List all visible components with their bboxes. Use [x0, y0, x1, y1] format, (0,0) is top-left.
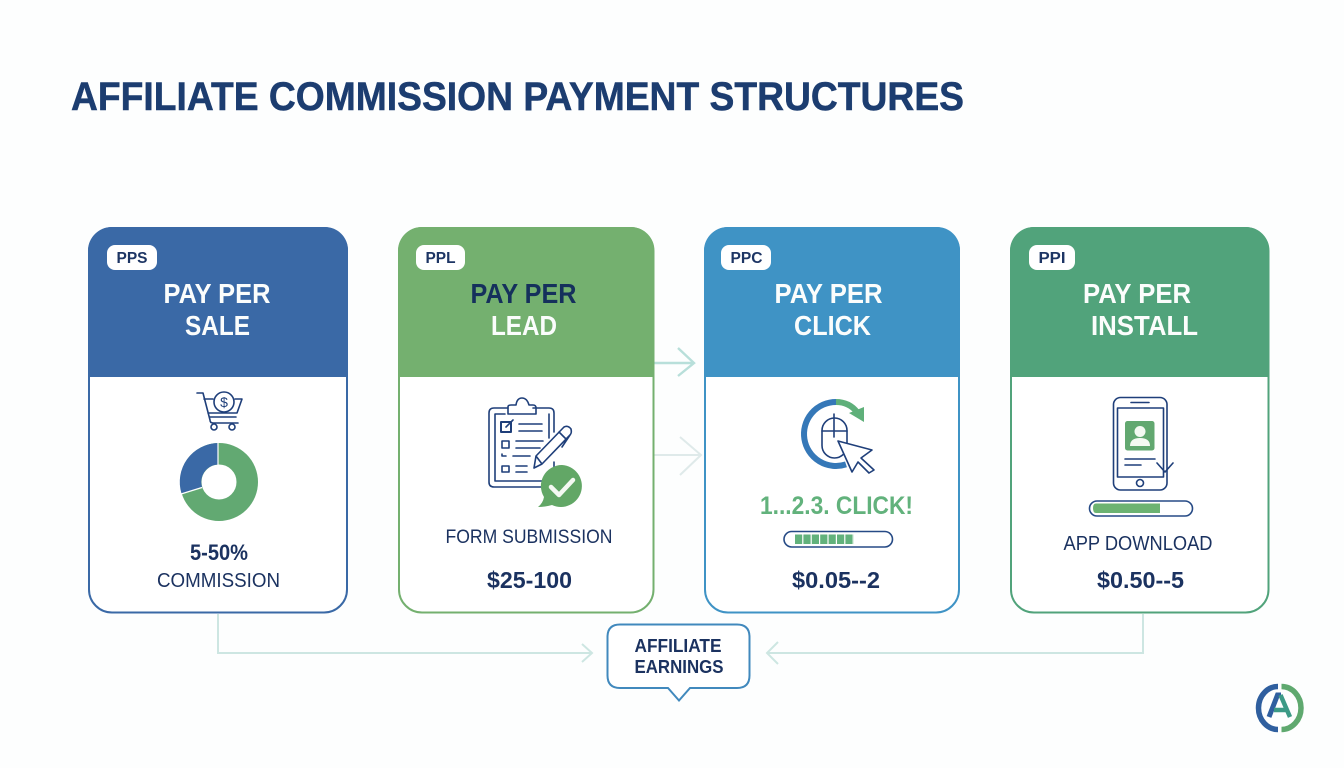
icon: clipboard form with pen and check — [489, 398, 582, 507]
badge: PPL: PPL — [426, 250, 456, 267]
arrow: install to earnings — [767, 614, 1143, 664]
value: $25-100: $25-100 — [487, 567, 572, 593]
arrow: PPL to PPC lower — [654, 437, 701, 475]
heading: pay per lead: PAY PER — [470, 278, 576, 309]
icon: phone with app — [1114, 398, 1173, 490]
label: app download: APP DOWNLOAD — [1064, 532, 1212, 555]
callout: affiliate earnings: AFFILIATE — [634, 636, 722, 656]
label: form submission: FORM SUBMISSION — [446, 526, 612, 548]
value: $0.50--5: $0.50--5 — [1097, 567, 1184, 593]
panel: pay per click — [704, 227, 960, 612]
arrow: sale to earnings — [218, 614, 592, 662]
icon: mouse click with circular arrow — [804, 402, 874, 473]
value: 5-50%: 5-50% — [190, 540, 248, 565]
heading: pay per sale: PAY PER — [164, 278, 270, 309]
panel: pay per install — [1010, 227, 1269, 612]
heading: pay per lead: LEAD — [491, 310, 557, 341]
badge: PPC — [721, 245, 771, 270]
heading: pay per click: PAY PER — [774, 278, 882, 309]
callout: affiliate earnings: EARNINGS — [634, 657, 724, 677]
heading: pay per install: INSTALL — [1091, 310, 1198, 341]
label: commission: COMMISSION — [157, 569, 280, 592]
progress bar: install — [1090, 501, 1192, 516]
badge: PPL — [416, 245, 465, 270]
callout: affiliate earnings — [608, 624, 750, 700]
heading: pay per click: CLICK — [794, 310, 871, 341]
heading: pay per install: PAY PER — [1083, 278, 1191, 309]
title: AFFILIATE COMMISSION PAYMENT STRUCTURES — [71, 75, 964, 119]
panel: pay per sale — [88, 227, 348, 612]
badge: PPS: PPS — [116, 250, 148, 267]
badge: PPI: PPI — [1038, 250, 1066, 267]
value: $0.05--2: $0.05--2 — [792, 567, 880, 593]
donut chart — [180, 443, 247, 510]
progress bar: segmented — [784, 532, 892, 547]
icon: shopping cart with coin: $ — [220, 394, 228, 410]
badge: PPI — [1029, 245, 1075, 270]
heading: pay per sale: SALE — [185, 310, 250, 341]
badge: PPS — [107, 245, 157, 270]
arrow: PPL to PPC upper — [654, 348, 694, 376]
logo — [1258, 686, 1301, 730]
icon: shopping cart with coin — [197, 392, 242, 430]
label: 1...2.3. click!: 1...2.3. CLICK! — [760, 492, 913, 520]
panel: pay per lead — [398, 227, 654, 612]
badge: PPC: PPC — [730, 250, 763, 267]
